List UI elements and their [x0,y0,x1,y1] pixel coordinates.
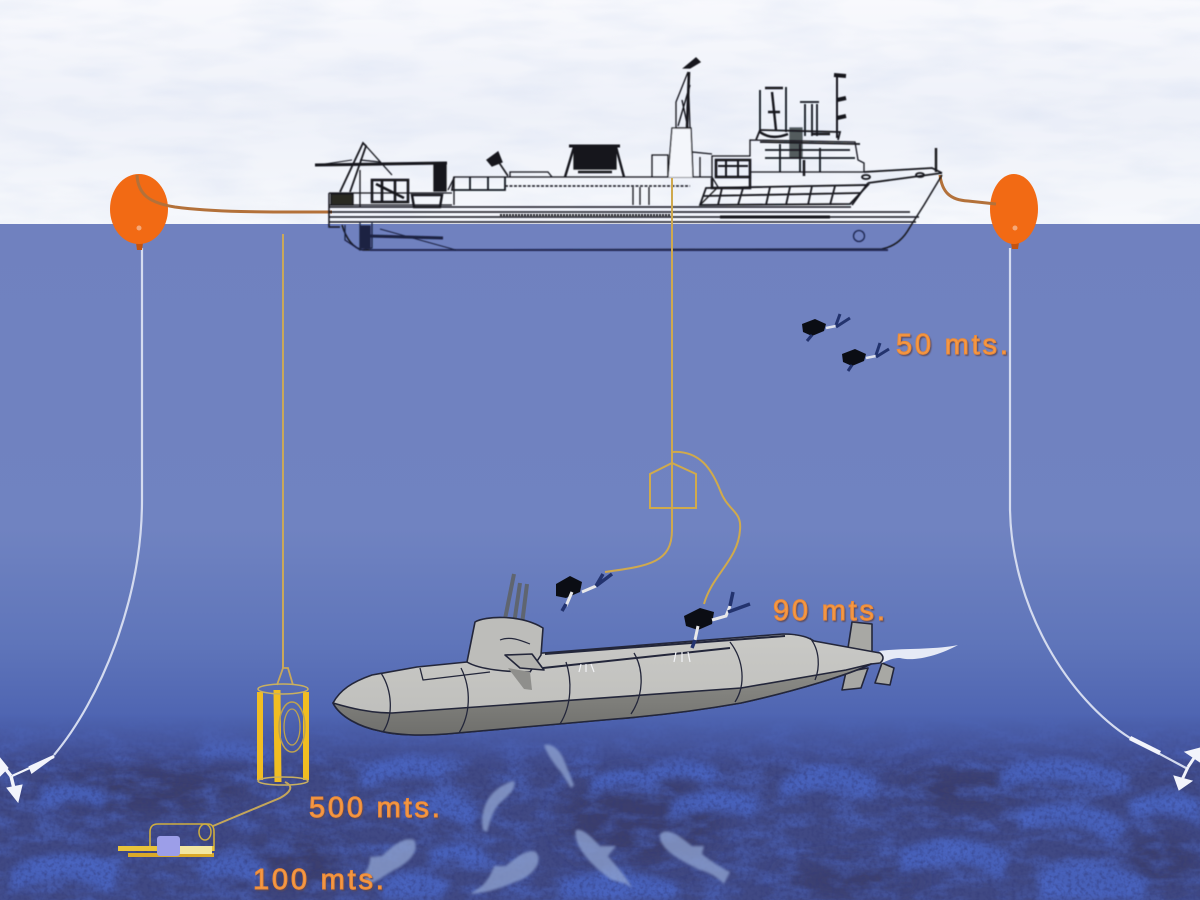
diver with line, left [556,574,612,611]
left buoy [110,174,168,250]
periscopes [504,574,527,624]
tow cables to buoys [137,175,996,212]
label: 100 metres: 100 mts. [253,864,387,896]
ship rudder and propeller [345,222,456,250]
fish 6 [660,831,730,884]
submarine [333,574,958,735]
fish 5 [576,830,632,888]
tail fins and propeller [842,622,894,690]
hull frames [381,636,818,733]
ship radar masts [756,74,846,140]
anchor left [0,756,54,802]
fish school [362,745,730,894]
diver on submarine [684,592,750,648]
sail diving plane [505,654,544,670]
fish 3 [362,839,416,884]
mooring line left [54,248,142,755]
ROV vehicle [118,824,214,857]
seabed [0,715,1200,900]
label: 90 metres: 90 mts. [773,595,888,627]
fish 1 [544,745,574,788]
fish 4 [470,851,539,894]
ROV tether [213,782,290,826]
plane shadow [508,668,532,690]
umbilical from ship to divers [605,178,672,572]
fish 2 [482,781,515,832]
ship [315,58,942,250]
label: 500 metres: 500 mts. [309,792,443,824]
label: 50 metres: 50 mts. [896,329,1011,361]
ship flag [487,152,508,176]
ship bridge block [652,128,864,177]
diving bell [650,452,740,604]
ship main mast [668,58,700,177]
upper diver 2 [842,343,889,371]
ship midsection superstructure [452,172,718,205]
upper diver 1 [802,314,850,341]
sky background [0,0,1200,225]
submarine hull [333,634,883,735]
mooring line right [1010,248,1186,768]
submarine lower hull shading [333,664,871,735]
ship aft deck and crane [315,143,454,207]
ROV cage [258,668,308,785]
anchor right [1130,738,1200,790]
right buoy [990,174,1038,249]
hull markings [579,652,690,672]
winch line to ROV cage [282,234,284,668]
ship hull [329,175,942,250]
ship central lifting frame [565,146,624,177]
submarine sail [467,617,543,672]
ship forward windows [700,148,942,205]
sea water [0,224,1200,900]
propeller wake [879,645,958,664]
